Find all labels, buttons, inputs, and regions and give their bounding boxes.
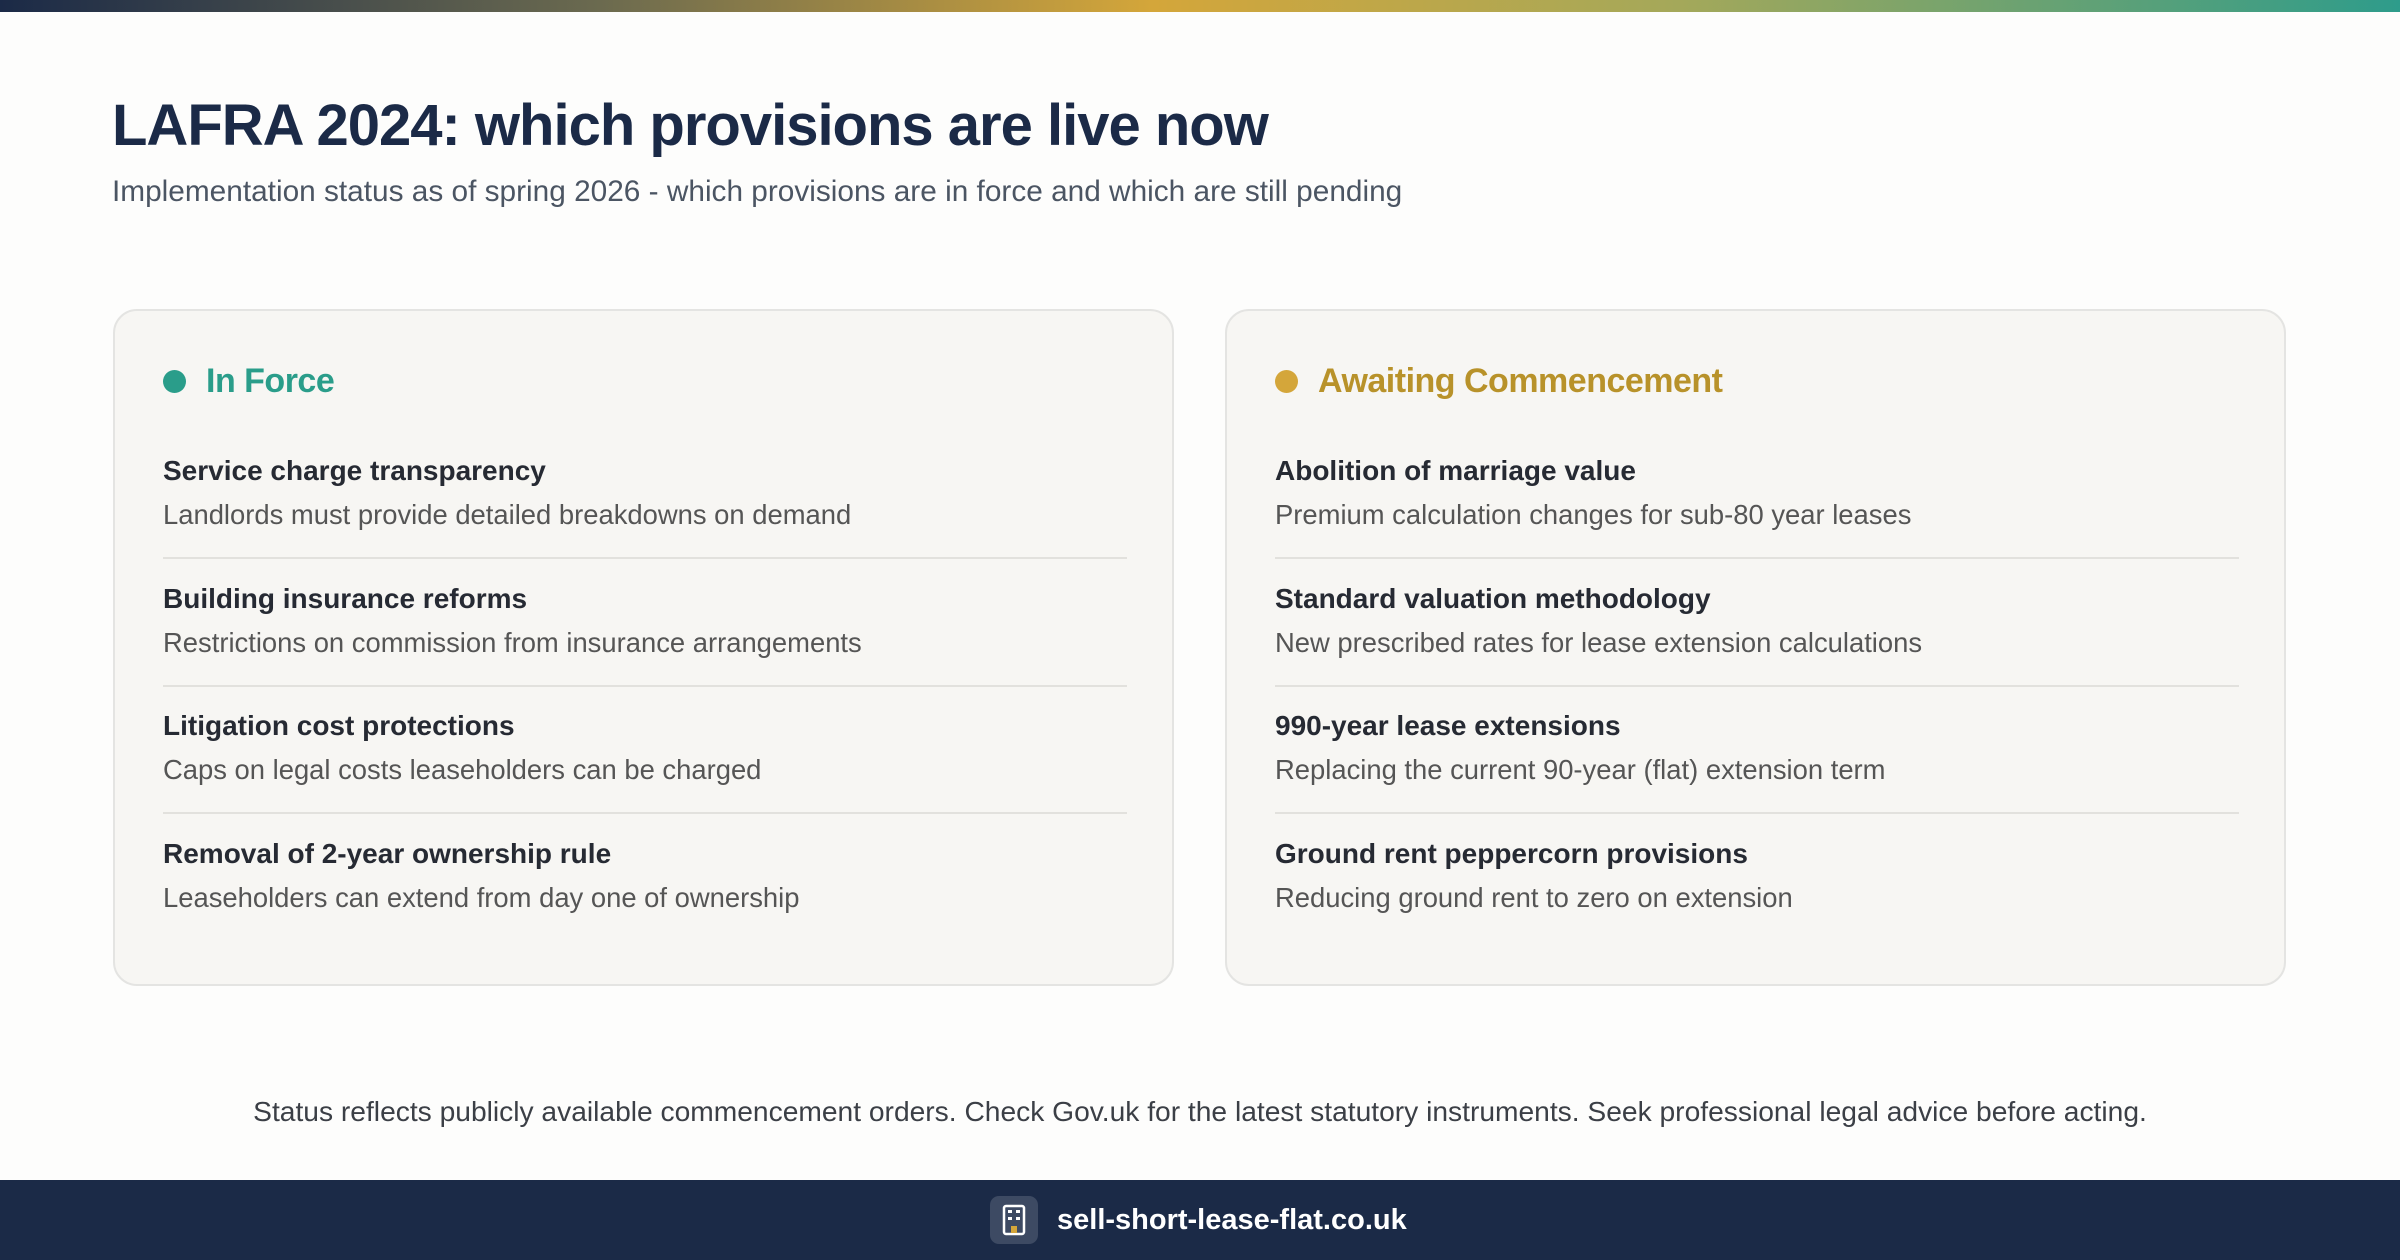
- footnote: Status reflects publicly available commencement orders. Check Gov.uk for the latest statutory instruments. Seek professional legal advice before acting.: [253, 1095, 2147, 1127]
- item: valuation: [1275, 583, 1922, 658]
- item: valuation: Standard valuation methodology: [1275, 583, 1711, 614]
- item: 990-year: Replacing the current 90-year (flat) extension term: [1275, 754, 1886, 785]
- heading: awaiting: Awaiting Commencement: [1318, 362, 1723, 400]
- item: 2-year rule: Leaseholders can extend from day one of ownership: [163, 882, 799, 913]
- footer bar: [0, 1180, 2400, 1260]
- panel: awaiting commencement: [1225, 309, 2286, 986]
- item: litigation: [163, 710, 761, 785]
- item: service charge: Service charge transparency: [163, 455, 546, 486]
- item: marriage value: [1275, 455, 1911, 530]
- item: service charge: Landlords must provide detailed breakdowns on demand: [163, 499, 851, 530]
- item: peppercorn: Reducing ground rent to zero on extension: [1275, 882, 1793, 913]
- item: 2-year rule: [163, 838, 799, 913]
- item: service charge: [163, 455, 851, 530]
- subtitle: Implementation status as of spring 2026 - which provisions are in force and which are still pending: [112, 175, 1402, 208]
- item: valuation: New prescribed rates for lease extension calculations: [1275, 627, 1922, 658]
- item: litigation: Caps on legal costs leaseholders can be charged: [163, 754, 761, 785]
- item: 2-year rule: Removal of 2-year ownership rule: [163, 838, 611, 869]
- item: 990-year: 990-year lease extensions: [1275, 710, 1621, 741]
- item: building insurance: Restrictions on commission from insurance arrangements: [163, 627, 862, 658]
- item: 990-year: [1275, 710, 1886, 785]
- item: peppercorn: [1275, 838, 1793, 913]
- item: peppercorn: Ground rent peppercorn provisions: [1275, 838, 1748, 869]
- title: LAFRA 2024: which provisions are live now: [112, 93, 1268, 158]
- item: litigation: Litigation cost protections: [163, 710, 515, 741]
- item: building insurance: Building insurance reforms: [163, 583, 527, 614]
- panel: in force: [113, 309, 1174, 986]
- item: building insurance: [163, 583, 862, 658]
- item: marriage value: Abolition of marriage value: [1275, 455, 1636, 486]
- icon: building: [990, 1196, 1038, 1244]
- footer url: sell-short-lease-flat.co.uk: [1057, 1204, 1407, 1236]
- item: marriage value: Premium calculation changes for sub-80 year leases: [1275, 499, 1911, 530]
- heading: in force: In Force: [206, 362, 334, 400]
